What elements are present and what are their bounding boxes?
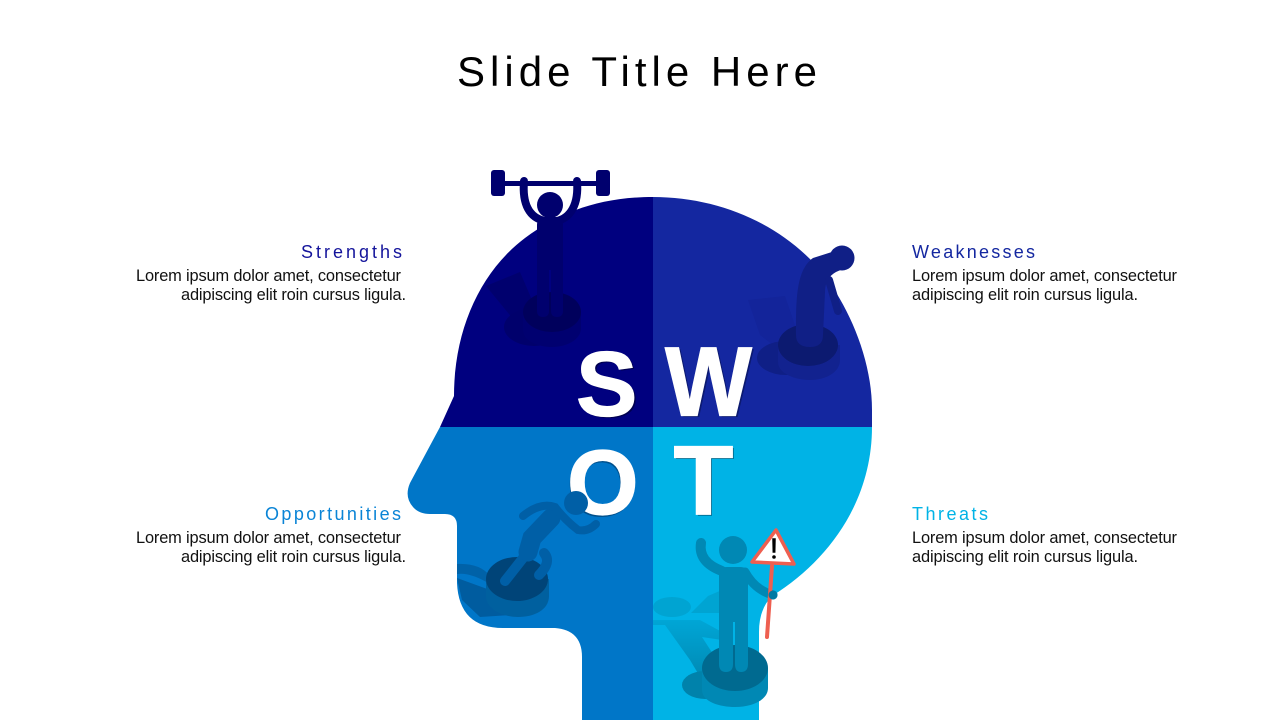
icon: runner head — [564, 491, 588, 515]
letter O: O — [567, 432, 639, 534]
text block: weaknesses — [912, 242, 1178, 304]
panel: threats quadrant — [653, 427, 883, 720]
text block: strengths: Lorem ipsum dolor amet, consectetur — [136, 267, 402, 285]
text block: weaknesses: adipiscing elit roin cursus ligula. — [912, 286, 1138, 304]
icon: weightlifter — [486, 170, 610, 347]
text block: strengths: adipiscing elit roin cursus ligula. — [181, 286, 406, 304]
text block: opportunities: adipiscing elit roin cursus ligula. — [181, 548, 406, 566]
text block: threats — [912, 504, 1178, 566]
text block: strengths: Strengths — [301, 242, 402, 262]
letter T: T — [675, 427, 735, 537]
text block: threats: Lorem ipsum dolor amet, consectetur — [912, 529, 1178, 547]
letter S: S — [576, 334, 637, 436]
text block: opportunities: Lorem ipsum dolor amet, consectetur — [136, 529, 402, 547]
panel: strengths quadrant — [440, 197, 653, 427]
icon: figure with warning sign — [653, 530, 794, 707]
head silhouette — [408, 197, 872, 720]
text block: threats: Threats — [912, 504, 988, 524]
letter W: W — [667, 329, 754, 439]
letter T: T — [674, 426, 733, 536]
text block: weaknesses: Lorem ipsum dolor amet, consectetur — [912, 267, 1178, 285]
text block: strengths — [136, 242, 406, 304]
text block: opportunities: Opportunities — [265, 504, 401, 524]
panel: weaknesses quadrant — [653, 197, 872, 427]
icon: runner — [457, 506, 596, 617]
icon: tired figure — [748, 246, 854, 380]
letter O: O — [566, 434, 638, 536]
letter S: S — [578, 335, 639, 437]
letter W: W — [665, 328, 752, 437]
text block: weaknesses: Weaknesses — [912, 242, 1035, 262]
text block: opportunities — [136, 504, 406, 566]
panel: opportunities quadrant — [400, 427, 653, 720]
text block: threats: adipiscing elit roin cursus ligula. — [912, 548, 1138, 566]
title: Slide Title Here — [457, 48, 817, 95]
